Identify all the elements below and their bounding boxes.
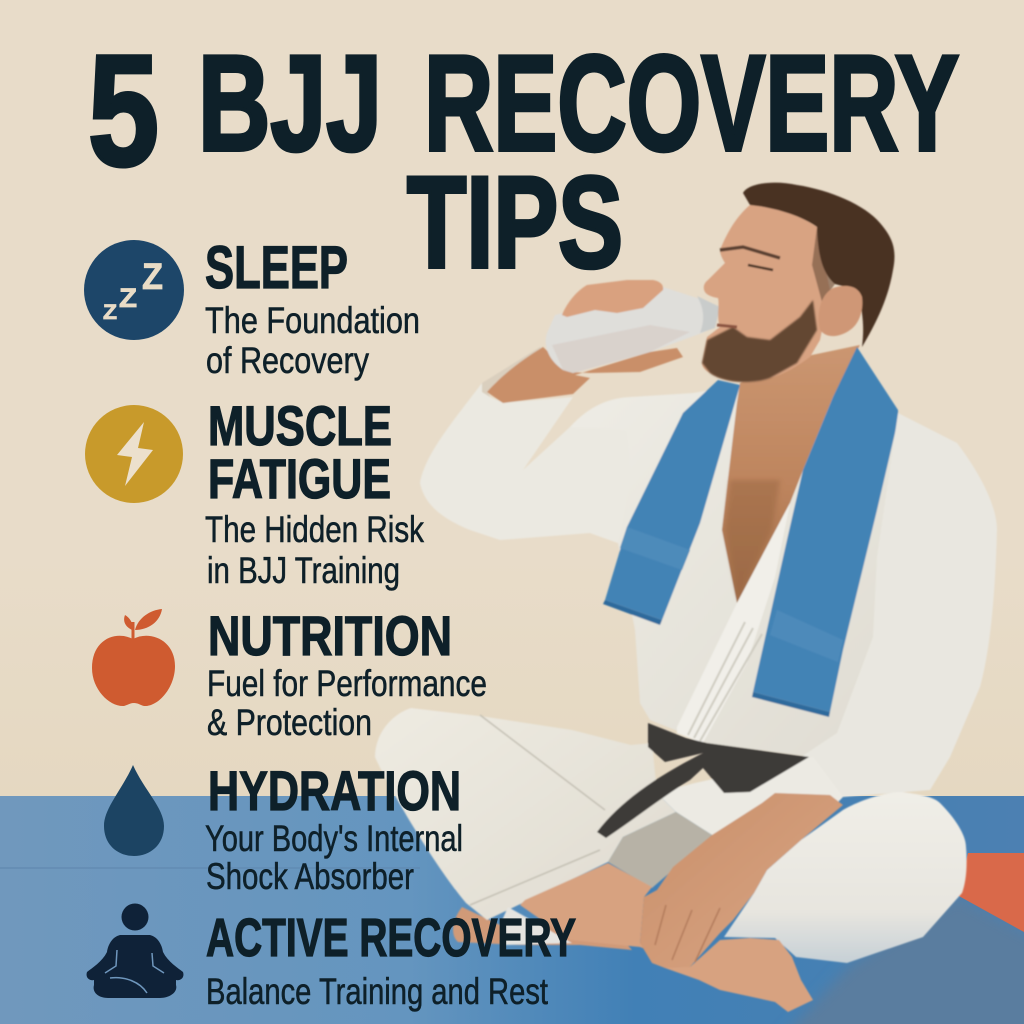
muscle fatigue text: in BJJ Training [207, 550, 400, 591]
hydration text: Your Body's Internal [205, 818, 463, 859]
gi torso [570, 385, 898, 757]
far foot [453, 907, 632, 950]
chest hair shading [725, 480, 780, 598]
illustration: athlete drinking water [375, 183, 997, 1012]
closed eye [748, 265, 773, 270]
nutrition text: Fuel for Performance [207, 663, 487, 704]
active recovery heading: ACTIVE RECOVERY [206, 908, 576, 968]
blue mat floor [0, 796, 1024, 1024]
sleeve cuff lining [482, 347, 545, 397]
beard [702, 300, 817, 382]
icon: water drop [104, 765, 164, 856]
face [702, 205, 830, 382]
bare chest and neck [722, 345, 860, 603]
water bottle [546, 287, 720, 373]
raised arm sleeve [420, 383, 629, 543]
gi lapel [677, 503, 790, 743]
tip: active recovery [87, 904, 576, 1012]
icon: sleep zzz: Z [119, 283, 137, 313]
icon: sleep zzz: Z [142, 256, 163, 297]
fingers gripping bottle [562, 280, 663, 317]
eyebrow and closed eye [720, 247, 780, 258]
gi skirt [657, 757, 843, 840]
sideburn fade [812, 227, 835, 302]
icon: sleep zzz [84, 240, 184, 340]
white inner hem [500, 907, 572, 945]
icon: sleep zzz: Z [103, 301, 117, 324]
forearm and hand on knee [640, 793, 843, 968]
muscle fatigue text: The Hidden Risk [205, 509, 424, 550]
finger lines [655, 905, 720, 962]
tip: muscle fatigue [85, 394, 424, 591]
nutrition text: & Protection [207, 702, 372, 743]
muscle fatigue heading [208, 394, 392, 510]
shin and foot [520, 863, 813, 1012]
icon: meditating person [87, 904, 183, 998]
sleep text: The Foundation [205, 300, 420, 341]
tip: hydration [104, 759, 463, 897]
title [88, 23, 959, 295]
lips [717, 325, 737, 327]
icon: lightning [85, 405, 183, 503]
title: TIPS [407, 149, 623, 295]
right arm sleeve [760, 413, 997, 807]
sleep text [205, 300, 420, 381]
shadowed gi fold [608, 812, 712, 888]
pants right leg [724, 792, 967, 963]
sleep text: of Recovery [206, 340, 369, 381]
tip: sleep [84, 234, 420, 381]
hydration heading: HYDRATION [208, 759, 461, 822]
muscle fatigue heading: MUSCLE [208, 394, 392, 457]
blue towel [603, 347, 898, 717]
nutrition text [207, 663, 487, 743]
hair [743, 183, 894, 347]
sleep heading: SLEEP [205, 234, 348, 301]
pants hem and fold lines [470, 715, 605, 905]
ear [819, 286, 862, 336]
icon: apple [92, 609, 175, 706]
background wall [0, 0, 1024, 797]
hydration text [205, 818, 463, 897]
forearm and palm [487, 347, 683, 403]
nutrition heading: NUTRITION [208, 604, 452, 667]
tip: nutrition [92, 604, 487, 743]
title: BJJ [198, 27, 382, 179]
active recovery text: Balance Training and Rest [206, 971, 549, 1012]
hydration text: Shock Absorber [206, 856, 414, 897]
muscle fatigue text [205, 509, 424, 591]
muscle fatigue heading: FATIGUE [208, 447, 391, 510]
black belt [597, 723, 809, 838]
pants left leg [375, 708, 676, 920]
title: 5 [88, 23, 159, 199]
